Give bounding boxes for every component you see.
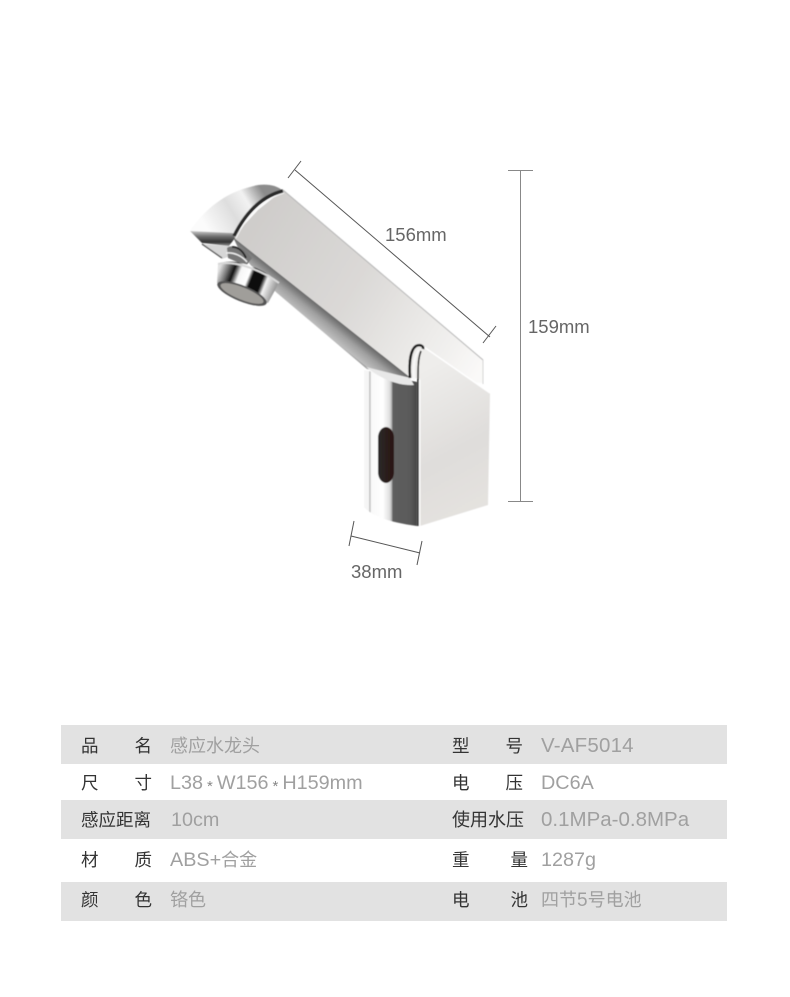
value: DC6A: DC6A xyxy=(541,772,594,794)
spout head xyxy=(190,185,284,259)
label: 159mm: 159mm xyxy=(528,316,590,337)
spec: 电压: 电 压 xyxy=(452,773,523,793)
collar highlight under spout xyxy=(366,367,414,385)
aerator xyxy=(214,246,279,311)
label: 156mm: 156mm xyxy=(385,224,447,245)
spec: 材质: 材 质 xyxy=(81,850,152,870)
spec: 感应距离: 感应距离 xyxy=(81,810,151,830)
sensor body xyxy=(364,370,417,526)
row band 1 xyxy=(61,725,727,764)
sensor window xyxy=(378,427,394,483)
value: 感应水龙头: 感应水龙头 xyxy=(170,736,260,756)
value: dimensions: L38 *W156 *H159mm xyxy=(170,772,363,795)
dimension line 38mm xyxy=(349,521,422,565)
spec: 尺寸: 尺 寸 xyxy=(81,773,152,793)
value: 铬色: 铬色 xyxy=(170,890,206,910)
panel edge chrome xyxy=(410,345,423,526)
value: 10cm: 10cm xyxy=(171,809,219,831)
spec: 型号: 型 号 xyxy=(452,736,523,756)
spec: 电池: 电 池 xyxy=(452,890,528,910)
spout top plate xyxy=(233,190,483,383)
spec table xyxy=(61,725,727,921)
value: 1287g: 1287g xyxy=(541,849,596,871)
spout lower edge line xyxy=(202,244,222,258)
spec: 使用水压: 使用水压 xyxy=(452,810,524,830)
label: 38mm: 38mm xyxy=(351,561,402,582)
value: water pressure: 0.1MPa-0.8MPa xyxy=(541,808,689,831)
spec: 重量: 重 量 xyxy=(452,850,528,870)
front panel xyxy=(420,346,490,526)
value: V-AF5014: V-AF5014 xyxy=(541,734,634,757)
spec: 品名: 品 名 xyxy=(81,736,152,756)
row band 5 xyxy=(61,882,727,921)
spec: 颜色: 颜 色 xyxy=(81,890,152,910)
spout underside xyxy=(233,237,411,378)
dimension line 159mm xyxy=(508,170,533,502)
faucet illustration xyxy=(190,160,533,566)
value: 四节5号电池: 四节5号电池 xyxy=(541,890,642,911)
dimension line 156mm xyxy=(288,161,496,343)
row band 3 xyxy=(61,800,727,839)
value: ABS+合金: ABS+合金 xyxy=(170,849,257,871)
